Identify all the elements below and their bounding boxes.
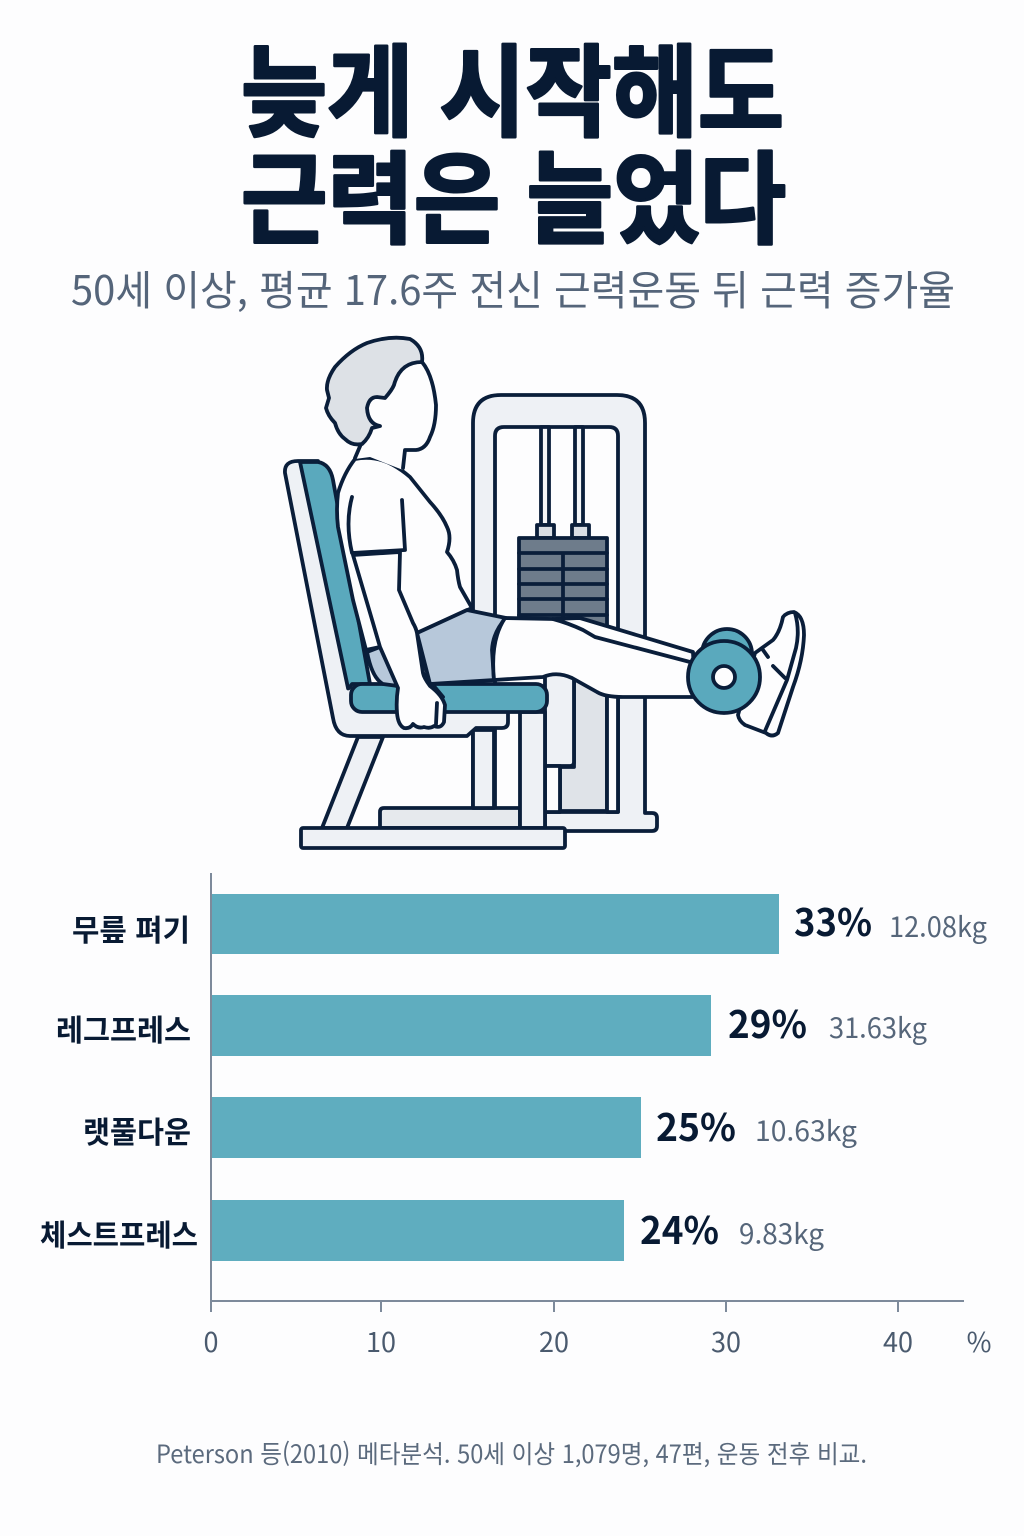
ankle roller [688, 629, 760, 713]
footnote: Peterson 등(2010) 메타분석. 50세 이상 1,079명, 47편, 운동 전후 비교. [156, 1435, 867, 1471]
title: 근력은 늘었다 [241, 119, 786, 264]
weight stack [519, 525, 607, 630]
left arm and hand [353, 552, 445, 728]
machine frame [473, 395, 657, 831]
seat frame [285, 461, 508, 736]
shirt and arm [337, 458, 506, 728]
axis tick labels: 20 [539, 1321, 569, 1360]
axis tick labels [204, 1321, 991, 1360]
head and hair [326, 338, 436, 470]
teal backrest [300, 462, 370, 688]
category labels: 무릎 펴기 [72, 906, 190, 950]
kilogram values [739, 906, 987, 1253]
cable rods [541, 427, 583, 525]
thigh and shin [493, 618, 695, 697]
illustration: seated leg extension machine [285, 338, 804, 848]
category labels [40, 906, 198, 1255]
percent values: 29% [728, 994, 807, 1049]
axis tick labels: 30 [711, 1321, 741, 1360]
kilogram values: 9.83kg [739, 1213, 824, 1253]
title: 늦게 시작해도 [241, 12, 784, 157]
shorts [367, 610, 506, 686]
percent values: 24% [640, 1200, 719, 1255]
chair base and posts [301, 712, 565, 848]
percent values: 25% [656, 1097, 736, 1152]
axis tick labels: 0 [204, 1321, 218, 1360]
axis tick labels: 40 [883, 1321, 913, 1360]
subtitle: 50세 이상, 평균 17.6주 전신 근력운동 뒤 근력 증가율 [71, 257, 955, 317]
axes [211, 873, 964, 1312]
axis tick labels: 10 [366, 1321, 396, 1360]
teal seat pad [351, 684, 547, 712]
percent values: 33% [794, 892, 872, 947]
bar chart: strength gain [40, 873, 991, 1360]
bars [212, 894, 779, 1261]
lower guard panel [545, 665, 618, 812]
category labels: 체스트프레스 [40, 1211, 198, 1255]
kilogram values: 31.63kg [829, 1007, 927, 1047]
axis tick labels: % [967, 1321, 991, 1360]
category labels: 랫풀다운 [83, 1108, 191, 1152]
kilogram values: 10.63kg [755, 1110, 857, 1150]
title [241, 12, 786, 264]
category labels: 레그프레스 [56, 1006, 191, 1050]
kilogram values: 12.08kg [889, 906, 987, 946]
shoe [738, 612, 804, 736]
percent values [640, 892, 872, 1255]
